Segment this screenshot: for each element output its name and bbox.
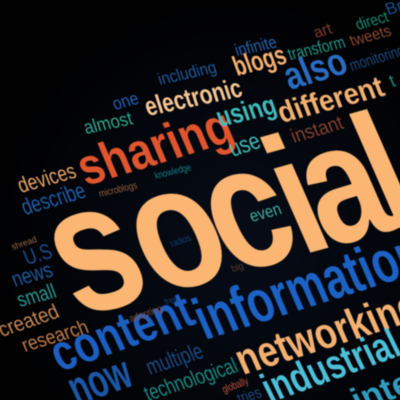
word: electronic: electronic — [140, 72, 246, 122]
word: almost: almost — [81, 109, 136, 139]
word: tweets: tweets — [347, 22, 394, 50]
word: using: using — [212, 89, 280, 133]
word: knowledge: knowledge — [153, 162, 193, 182]
word: different: different — [273, 71, 389, 130]
word: one: one — [109, 88, 142, 114]
word: devices: devices — [14, 158, 80, 198]
word: microblogs: microblogs — [97, 180, 139, 200]
word: blogs: blogs — [228, 39, 290, 82]
word: art: art — [311, 20, 335, 42]
word: news: news — [7, 257, 56, 292]
word: sharing: sharing — [68, 97, 242, 197]
word: research: research — [18, 316, 92, 357]
word: content: content — [40, 282, 203, 383]
word: U.S: U.S — [19, 239, 56, 270]
word: instant: instant — [288, 112, 347, 148]
word: t: t — [386, 71, 398, 91]
word: direct: direct — [353, 8, 392, 34]
word: shread: shread — [10, 234, 38, 252]
word: including: including — [155, 58, 219, 89]
word: use: use — [224, 128, 265, 162]
word: transform: transform — [285, 33, 348, 64]
word: radios: radios — [169, 233, 193, 250]
word: infinite: infinite — [232, 33, 279, 60]
word: globally: globally — [220, 376, 251, 396]
word: even: even — [246, 199, 284, 226]
word: small: small — [14, 280, 59, 312]
word: big: big — [230, 261, 246, 275]
word: free: free — [163, 293, 179, 307]
word: multiple: multiple — [141, 338, 207, 380]
word: also: also — [277, 40, 354, 98]
word: adopting: adopting — [128, 304, 164, 325]
word: describe: describe — [17, 177, 89, 220]
